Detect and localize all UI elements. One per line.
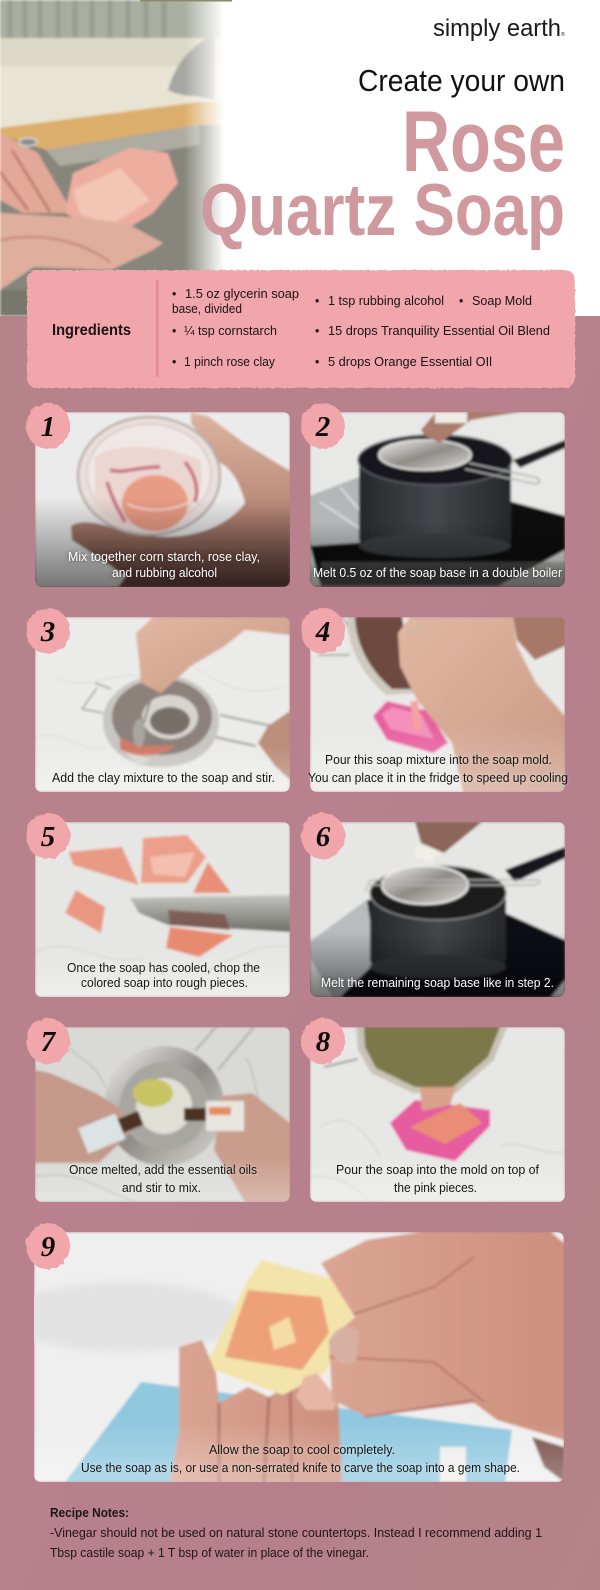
photo: stirring clay mixture — [35, 617, 290, 792]
logo: simply earth: simply earth — [433, 15, 561, 42]
ingredient list: 1 pinch rose clay — [184, 355, 276, 369]
caption: step 5 — [67, 961, 260, 990]
title: Create your own — [358, 63, 565, 98]
badge: 9 — [26, 1223, 70, 1269]
caption: step 7: Once melted, add the essential oils — [69, 1163, 257, 1177]
ingredient list: • — [315, 294, 319, 308]
step 2 — [301, 403, 565, 587]
photo: pouring soap into mold — [310, 617, 565, 792]
step 9 — [4, 1223, 564, 1482]
badge: 6 — [301, 813, 345, 859]
caption: step 8: Pour the soap into the mold on top of — [336, 1163, 540, 1177]
step 1 — [26, 403, 290, 587]
badge: 7: 7 — [41, 1026, 57, 1058]
photo: holding finished soap — [4, 1232, 564, 1482]
ingredient list: • — [459, 294, 463, 308]
ingredient list: • — [315, 324, 319, 338]
photo: melting remaining soap base — [310, 822, 565, 997]
step 6 — [301, 813, 565, 997]
caption: step 3: Add the clay mixture to the soap and stir. — [52, 771, 275, 785]
badge: 7 — [26, 1018, 70, 1064]
badge: 4 — [301, 608, 345, 654]
photo: pouring soap over pink pieces — [310, 1027, 565, 1202]
caption: step 8 — [336, 1163, 540, 1195]
caption: step 9: Use the soap as is, or use a non-serrated knife to carve the soap into a gem shape. — [81, 1461, 520, 1475]
ingredient list: • — [172, 324, 176, 338]
step 7 — [26, 1018, 290, 1202]
badge: 3: 3 — [40, 616, 55, 648]
ingredient list — [172, 287, 550, 369]
photo: adding essential oils — [35, 1027, 290, 1202]
badge: 2 — [301, 403, 345, 449]
caption: step 9 — [81, 1443, 520, 1475]
caption: step 9: Allow the soap to cool completely. — [209, 1443, 395, 1457]
logo: simply earth: ® — [561, 31, 565, 38]
header photo: hands washing with soap — [0, 0, 252, 316]
badge: 6: 6 — [316, 821, 331, 853]
caption: step 1 — [68, 550, 260, 580]
ingredient list: 1.5 oz glycerin soap — [185, 287, 299, 301]
ingredient list: • — [315, 355, 319, 369]
badge: 3 — [26, 608, 70, 654]
badge: 4: 4 — [315, 616, 330, 648]
photo: double boiler on induction plate — [310, 412, 565, 587]
ingredient list: base, divided — [172, 302, 242, 316]
ingredient list: 1 tsp rubbing alcohol — [328, 294, 444, 308]
title — [200, 63, 565, 251]
badge: 8: 8 — [316, 1026, 331, 1058]
badge: 5: 5 — [41, 821, 55, 853]
badge: 8 — [301, 1018, 345, 1064]
badge: 1 — [26, 403, 70, 449]
recipe notes: Recipe Notes: — [50, 1506, 129, 1520]
caption: step 1: Mix together corn starch, rose clay, — [68, 550, 260, 564]
photo: mixing bowl in hand — [35, 412, 290, 587]
badge: 2: 2 — [315, 411, 330, 443]
heading: ingredients: Ingredients — [52, 322, 131, 339]
photo: chopping colored soap — [35, 822, 290, 997]
badge: 5 — [26, 813, 70, 859]
step 3 — [26, 608, 290, 792]
caption: step 5: colored soap into rough pieces. — [81, 976, 248, 990]
caption: step 1: and rubbing alcohol — [112, 566, 217, 580]
ingredient list: Soap Mold — [472, 294, 532, 308]
ingredient list: • — [172, 287, 176, 301]
badge: 9: 9 — [41, 1231, 55, 1263]
step 8 — [301, 1018, 565, 1202]
caption: step 4: You can place it in the fridge to speed up cooling — [308, 771, 568, 785]
step 4 — [301, 608, 568, 792]
caption: step 7 — [69, 1163, 257, 1195]
caption: step 4 — [308, 753, 568, 785]
panel: ingredients — [27, 270, 575, 388]
ingredient list: 15 drops Tranquility Essential Oil Blend — [328, 324, 550, 338]
caption: step 5: Once the soap has cooled, chop the — [67, 961, 260, 975]
recipe notes: -Vinegar should not be used on natural stone countertops. Instead I recommend adding 1 — [50, 1526, 542, 1540]
recipe notes — [50, 1506, 542, 1560]
ingredient list: 5 drops Orange Essential OIl — [328, 355, 492, 369]
caption: step 2: Melt 0.5 oz of the soap base in a double boiler — [313, 566, 562, 580]
step 5 — [26, 813, 290, 997]
ingredient list: • — [172, 355, 176, 369]
recipe notes: Tbsp castile soap + 1 T bsp of water in place of the vinegar. — [50, 1546, 369, 1560]
ingredient list: ¼ tsp cornstarch — [184, 324, 277, 338]
caption: step 4: Pour this soap mixture into the soap mold. — [325, 753, 552, 767]
badge: 1: 1 — [41, 411, 55, 443]
caption: step 6: Melt the remaining soap base like in step 2. — [321, 976, 554, 990]
caption: step 7: and stir to mix. — [122, 1181, 201, 1195]
caption: step 8: the pink pieces. — [394, 1181, 477, 1195]
